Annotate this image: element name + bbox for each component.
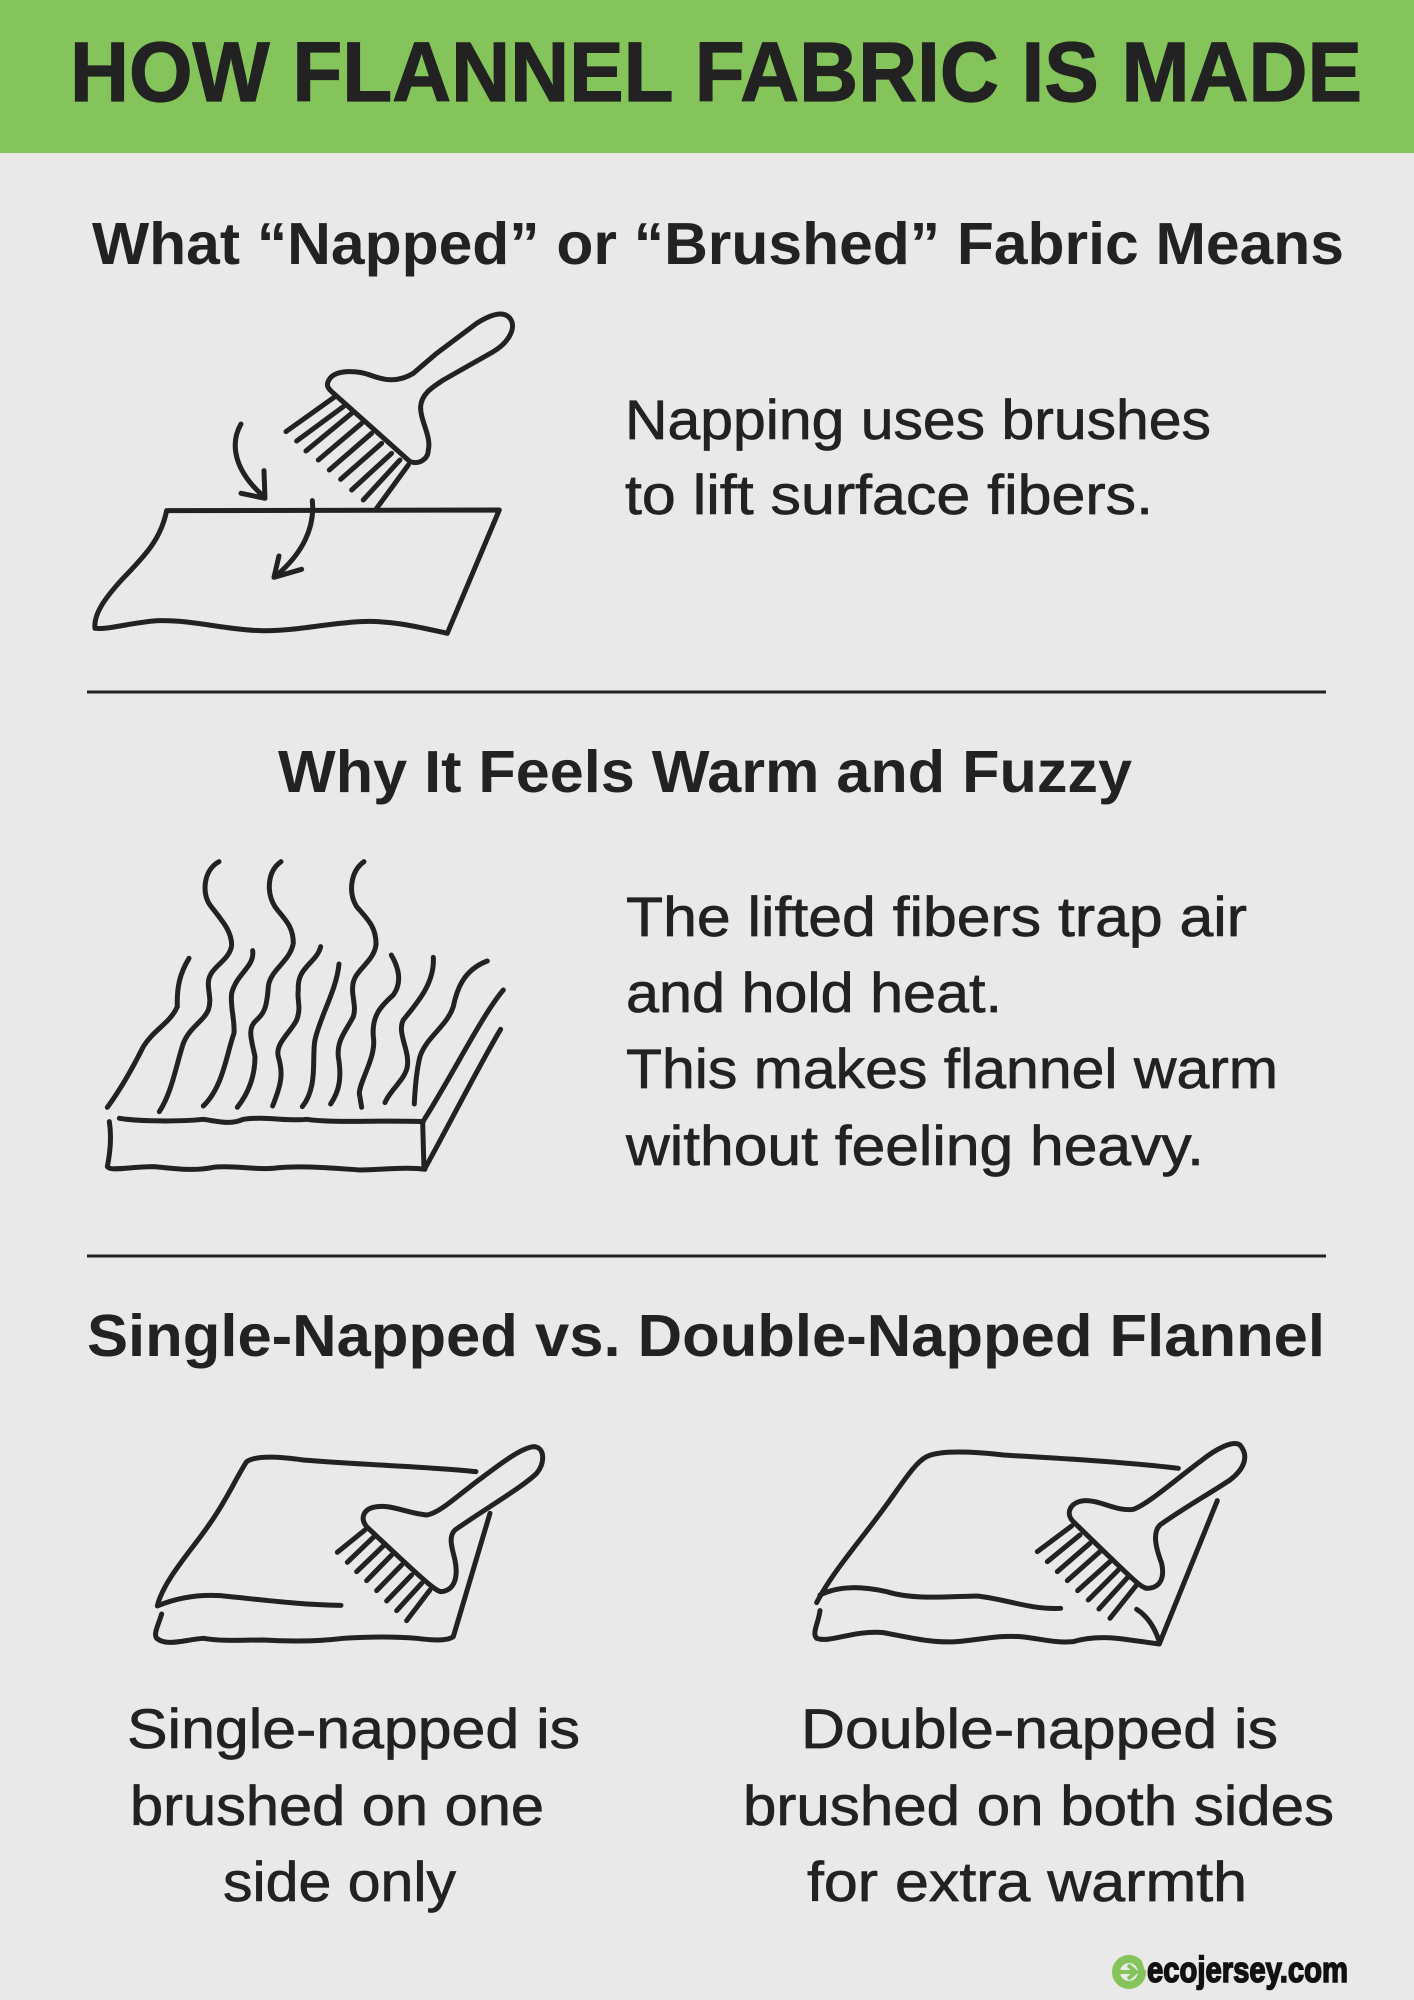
logo: ecojersey.com [1116,1949,1348,1990]
heading: napped or brushed: What “Napped” or “Brushed” Fabric Means [92,211,1344,277]
text: warmth explanation [625,885,1278,1177]
heading: single vs double: Single-Napped vs. Double-Napped Flannel [87,1303,1325,1369]
icon: green eco circle [1116,1952,1151,1985]
icon: brush on fabric with arrows [95,314,513,633]
caption: double-napped: brushed on both sides [743,1774,1334,1837]
title banner [0,0,1414,153]
text: napping description: Napping uses brushes [625,388,1211,451]
caption: single-napped [127,1697,580,1913]
text: warmth explanation: and hold heat. [626,961,1002,1024]
caption: double-napped [743,1697,1334,1913]
caption: single-napped: Single-napped is [127,1697,580,1760]
text: napping description [625,388,1211,526]
caption: double-napped: Double-napped is [801,1697,1278,1760]
panel: single vs double napped [87,1303,1334,1913]
text: warmth explanation: This makes flannel warm [626,1037,1278,1100]
title: HOW FLANNEL FABRIC IS MADE [70,25,1362,119]
caption: single-napped: side only [223,1850,456,1913]
icon: double-napped fabric with brush [815,1444,1245,1644]
logo text: ecojersey.com [1147,1949,1348,1990]
icon: fibers rising from fabric block [107,862,503,1170]
caption: double-napped: for extra warmth [807,1850,1247,1913]
caption: single-napped: brushed on one [130,1774,544,1837]
text: warmth explanation: without feeling heavy. [625,1114,1204,1177]
icon: single-napped fabric with brush [156,1447,543,1642]
panel: warm and fuzzy [107,739,1278,1177]
text: warmth explanation: The lifted fibers trap air [626,885,1247,948]
heading: warm and fuzzy: Why It Feels Warm and Fuzzy [278,739,1132,805]
text: napping description: to lift surface fibers. [625,463,1153,526]
panel: napped or brushed fabric [92,211,1344,633]
